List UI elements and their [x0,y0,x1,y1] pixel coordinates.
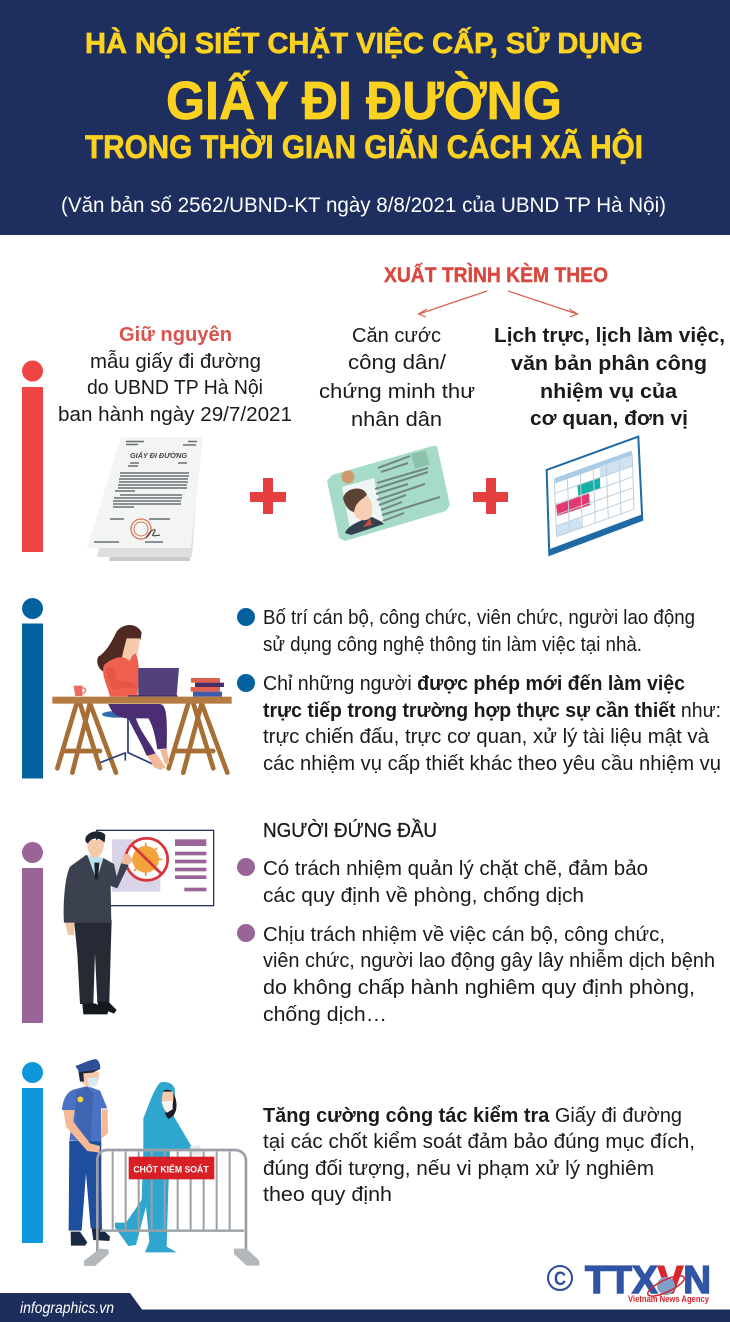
bullet 1 [237,858,255,876]
panel: section 4 checkpoint [22,1059,695,1266]
barrier feet [84,1249,109,1266]
text: inspection: tại các chốt kiểm soát đảm bảo đúng mục đích, [263,1131,695,1153]
bullet 2 [237,924,255,942]
text: citizen id: công dân/ [348,352,446,374]
guard shirt [62,1086,107,1142]
guard arms [63,1110,100,1153]
sign [129,1157,214,1179]
text: bullet 2: Chỉ những người được phép mới đến làm việc [263,673,685,695]
text: form description [58,350,292,426]
guard trousers [69,1141,102,1231]
text: bullet 2 [263,924,715,1026]
text: inspection [263,1105,695,1206]
text: bullet 1: các quy định về phòng, chống dịch [263,885,584,907]
icon: document [87,437,203,561]
guard head [80,1072,99,1087]
text: form description: do UBND TP Hà Nội [87,377,263,399]
icon: plus 1 [250,478,286,514]
text: form description: ban hành ngày 29/7/2021 [58,404,292,426]
text: inspection: Tăng cường công tác kiểm tra Giấy đi đường [263,1105,682,1127]
text: bullet 2: do không chấp hành nghiêm quy định phòng, [263,977,695,999]
text: citizen id: chứng minh thư [319,381,475,403]
desk legs [57,703,227,773]
title line 1: HÀ NỘI SIẾT CHẶT VIỆC CẤP, SỬ DỤNG [85,26,643,60]
legs [108,704,167,756]
text: bullet 2: chống dịch… [263,1004,387,1026]
virus prohibition [126,839,167,880]
text: schedule: nhiệm vụ của [540,381,678,403]
panel: section 2 working from home [22,598,721,778]
text: bullet 1 [263,607,695,656]
icon: calendar [547,437,642,555]
cup [74,686,82,696]
text: bullet 2: trực tiếp trong trường hợp thực sự cần thiết như: [263,700,721,722]
icon: plus 2 [473,478,508,514]
desk top [52,697,232,704]
jacket [64,855,129,923]
text: bullet 2: trực chiến đấu, trực cơ quan, xử lý tài liệu mật và [263,726,710,748]
panel: section 1 documents [22,264,725,561]
title line 3: TRONG THỜI GIAN GIÃN CÁCH XÃ HỘI [85,129,643,165]
illustration: woman at desk [52,625,232,773]
stool [100,717,153,764]
marker i cyan [22,1062,43,1243]
board [97,830,214,906]
heading: NGƯỜI ĐỨNG ĐẦU [263,819,437,842]
wordmark: TTXVN [585,1259,711,1302]
text: bullet 2 [263,673,721,775]
text: inspection: đúng đối tượng, nếu vi phạm xử lý nghiêm [263,1158,654,1180]
footer source: infographics.vn [20,1300,114,1317]
heading: keep form: Giữ nguyên [119,324,232,346]
marker i blue [22,598,43,778]
barrier [97,1150,246,1253]
illustration: presenter and board [64,830,214,1014]
text: schedule: cơ quan, đơn vị [530,408,688,430]
torso [103,653,139,697]
arrows [418,291,578,317]
subtitle: (Văn bản số 2562/UBND-KT ngày 8/8/2021 của UBND TP Hà Nội) [61,194,666,217]
marker i purple [22,842,43,1023]
text: citizen id [319,325,475,431]
laptop [138,668,179,696]
bullet 2 [237,674,255,692]
hand right [121,853,133,865]
logo: TTXVN: C [554,1269,566,1290]
copyright mark [548,1266,572,1290]
footer band [0,1293,730,1322]
agency name: Vietnam News Agency [628,1294,709,1304]
neck and face [122,638,140,661]
marker i red [22,360,43,552]
heading: present along with: XUẤT TRÌNH KÈM THEO [384,264,608,287]
text: schedule: văn bản phân công [511,353,707,375]
logo: TTXVN [548,1259,711,1304]
text: bullet 2: các nhiệm vụ cấp thiết khác theo yêu cầu nhiệm vụ [263,753,721,775]
text: bullet 1 [263,858,648,907]
header banner [0,0,730,235]
text: citizen id: Căn cước [352,325,441,347]
books [191,678,220,683]
title line 2: GIẤY ĐI ĐƯỜNG [166,71,562,131]
text: bullet 2: Chịu trách nhiệm về việc cán bộ, công chức, [263,924,665,946]
text: form description: mẫu giấy đi đường [90,350,261,373]
text: bullet 1: Bố trí cán bộ, công chức, viên chức, người lao động [263,607,695,629]
illustration: checkpoint [62,1059,259,1266]
globe [657,1277,675,1295]
text: bullet 2: viên chức, người lao động gây lây nhiễm dịch bệnh [263,949,715,972]
head [87,840,104,858]
text: schedule [494,325,725,430]
legs and shoes [74,920,112,1004]
icon: id card [327,446,450,541]
arm [106,667,137,689]
text: bullet 1: Có trách nhiệm quản lý chặt chẽ, đảm bảo [263,858,648,880]
text: citizen id: nhân dân [351,409,442,431]
panel: section 3 head of unit [22,819,715,1026]
illustration: checkpoint: CHỐT KIỂM SOÁT [133,1164,209,1175]
text: inspection: theo quy định [263,1184,392,1206]
text: schedule: Lịch trực, lịch làm việc, [494,325,725,347]
text: bullet 1: sử dụng công nghệ thông tin làm việc tại nhà. [263,634,642,656]
worker suit [115,1082,192,1252]
icon: document: GIẤY ĐI ĐƯỜNG [130,451,188,460]
bullet 1 [237,608,255,626]
head and hair back [97,625,142,672]
hand left [65,922,75,935]
